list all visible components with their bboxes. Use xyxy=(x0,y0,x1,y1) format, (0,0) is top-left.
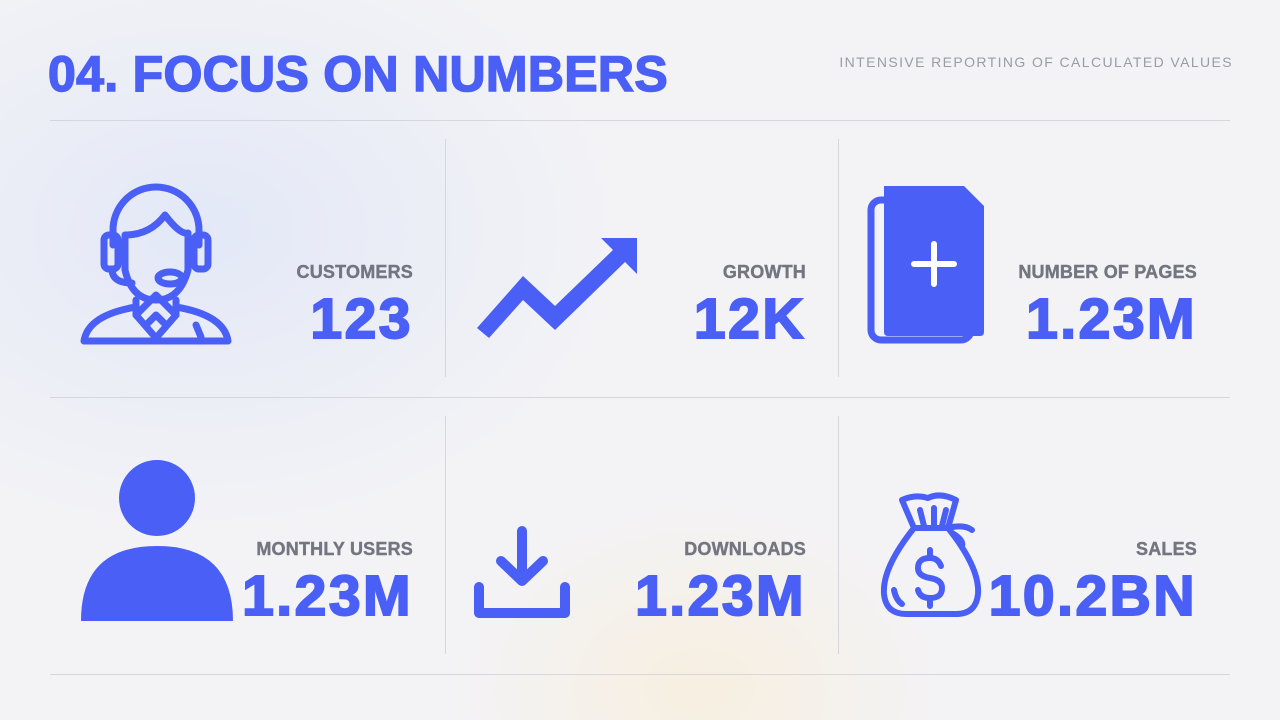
panel: monthly users xyxy=(81,460,413,628)
number: 10.2BN xyxy=(989,564,1197,628)
number: 1.23M xyxy=(242,564,413,628)
subtitle: INTENSIVE REPORTING OF CALCULATED VALUES xyxy=(839,54,1233,70)
label: MONTHLY USERS xyxy=(256,539,413,559)
panel: sales xyxy=(880,492,1197,628)
number: 12K xyxy=(694,287,806,351)
number: 1.23M xyxy=(1026,287,1197,351)
label: SALES xyxy=(1136,539,1197,559)
panel: number of pages xyxy=(868,186,1197,351)
label: NUMBER OF PAGES xyxy=(1018,262,1197,282)
icon: money bag xyxy=(880,492,982,617)
panel: downloads xyxy=(474,526,806,628)
icon: trend arrow xyxy=(477,238,637,338)
panel: customers xyxy=(80,184,413,351)
icon: download xyxy=(474,526,570,618)
icon: user xyxy=(81,460,233,621)
label: GROWTH xyxy=(723,262,806,282)
label: DOWNLOADS xyxy=(684,539,806,559)
title: 04. FOCUS ON NUMBERS xyxy=(48,46,668,102)
number: 1.23M xyxy=(635,564,806,628)
panel: growth xyxy=(477,238,806,351)
icon: support agent xyxy=(80,184,232,344)
label: CUSTOMERS xyxy=(297,262,413,282)
number: 123 xyxy=(310,287,413,351)
icon: add pages xyxy=(868,186,984,344)
